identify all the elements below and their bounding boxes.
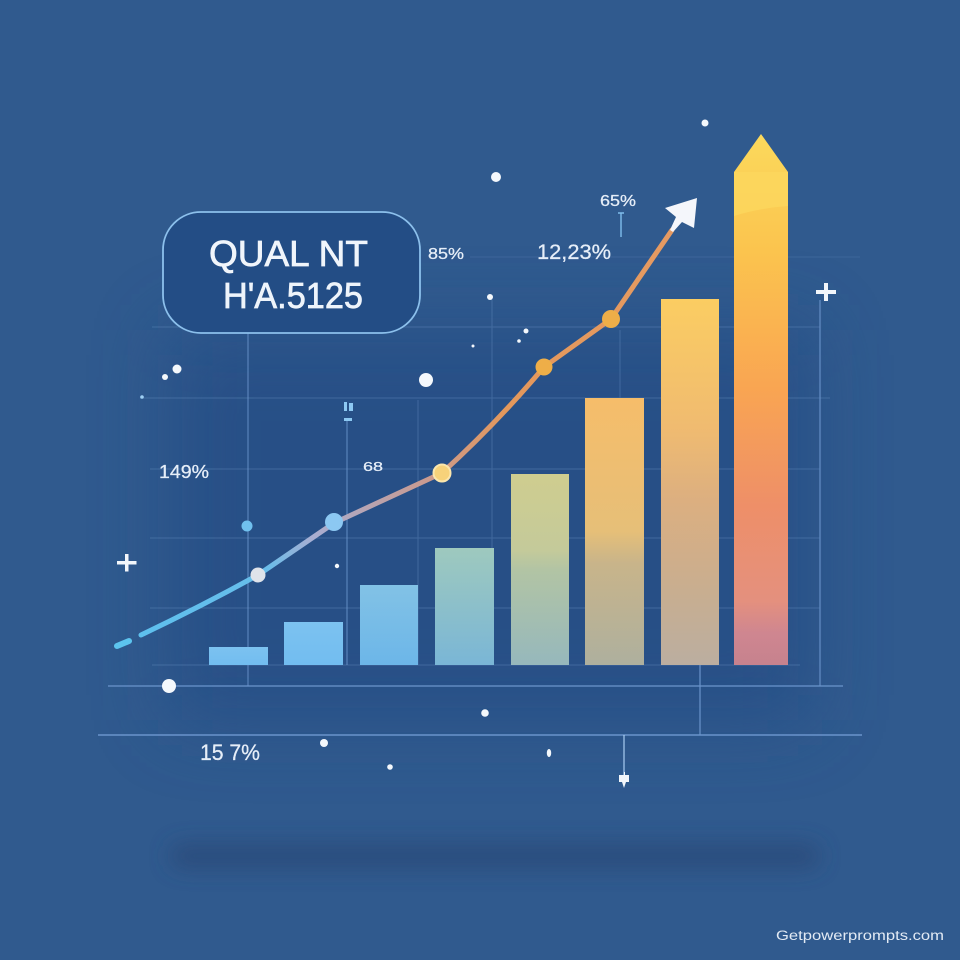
value labels xyxy=(159,193,636,765)
callout box xyxy=(163,212,420,333)
bar 2 xyxy=(284,622,343,665)
bar 8 lighter band xyxy=(734,172,788,216)
label 149%: 149% xyxy=(159,462,209,482)
chart grid xyxy=(140,257,860,665)
bar 5 xyxy=(511,474,569,665)
label 65%: 65% xyxy=(600,193,636,210)
bar 4 xyxy=(435,548,494,665)
bar 1 xyxy=(209,647,268,665)
small marker above grid xyxy=(344,402,353,421)
bar 3 xyxy=(360,585,418,665)
plus icons xyxy=(117,283,836,788)
ground shadow xyxy=(170,844,820,868)
bar chart xyxy=(209,134,788,665)
label 85%: 85% xyxy=(428,246,464,263)
axis lines xyxy=(98,300,862,782)
arrow head xyxy=(665,198,697,232)
callout title: QUAL NT xyxy=(209,233,368,274)
callout value: H'A.5125 xyxy=(223,275,363,316)
label 12,23%: 12,23% xyxy=(537,241,611,264)
bar 6 xyxy=(585,398,644,665)
label 68: 68 xyxy=(363,459,383,474)
decorative dots xyxy=(140,120,708,770)
bar 7 xyxy=(661,299,719,665)
small marker above 65% xyxy=(618,213,624,237)
data points xyxy=(250,310,620,582)
label 157%: 15 7% xyxy=(200,740,260,765)
bar 8 arrow-shaped xyxy=(734,134,788,665)
trend line xyxy=(117,230,672,646)
watermark: Getpowerprompts.com xyxy=(776,928,944,943)
